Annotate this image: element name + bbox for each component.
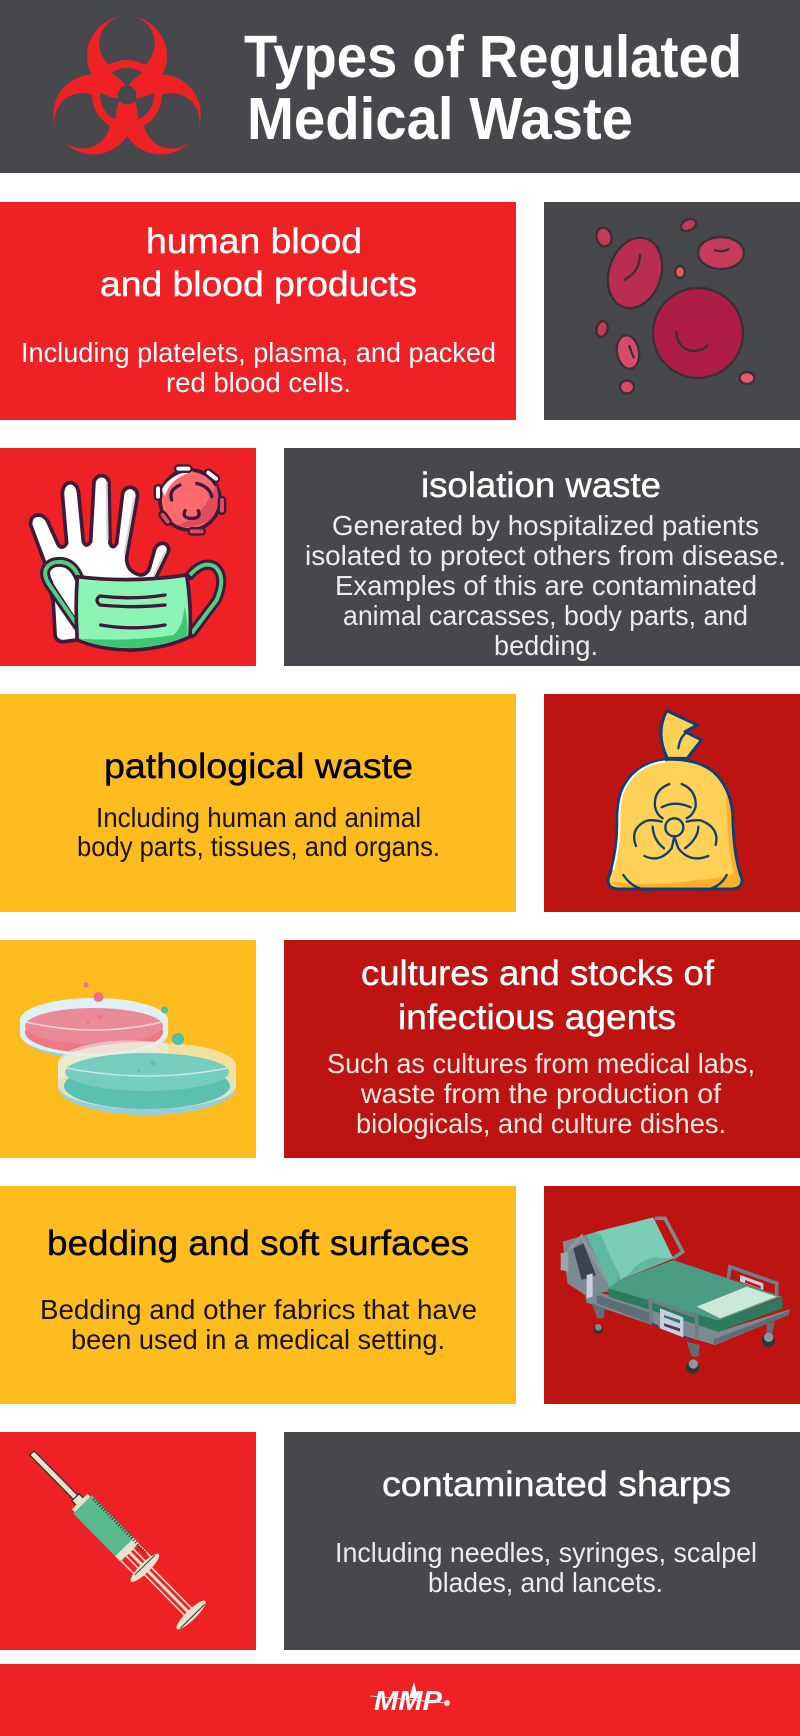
description: cultures and stocks	[327, 1048, 755, 1139]
heading: pathological waste: pathological waste	[104, 747, 413, 786]
heading: bedding and soft surfaces: bedding and soft surfaces	[47, 1224, 469, 1263]
description: isolation waste: Generated by hospitalized patients	[332, 510, 759, 541]
description: contaminated sharps: Including needles, syringes, scalpel	[335, 1537, 757, 1568]
panel: biohazard bag illustration	[544, 694, 800, 912]
mask body	[76, 575, 190, 650]
teal dish	[58, 1041, 236, 1115]
panel: contaminated sharps	[284, 1432, 800, 1650]
description: bedding	[40, 1294, 477, 1355]
glove	[31, 476, 169, 642]
description: cultures and stocks: waste from the production of	[360, 1078, 721, 1109]
heading: human blood: human blood	[146, 222, 362, 261]
description: isolation waste	[305, 510, 786, 661]
description: isolation waste: isolated to protect others from disease.	[305, 540, 786, 571]
panel: glove, mask and virus illustration	[0, 448, 256, 666]
panel: bedding and soft surfaces	[0, 1186, 516, 1404]
description: cultures and stocks: Such as cultures from medical labs,	[327, 1048, 755, 1079]
panel: pathological waste	[0, 694, 516, 912]
pink dish	[20, 998, 168, 1059]
description: isolation waste: animal carcasses, body parts, and	[343, 600, 748, 631]
panel: human blood and blood products	[0, 202, 516, 420]
title: Types of Regulated	[244, 24, 742, 90]
heading: isolation waste: isolation waste	[421, 466, 661, 505]
panel: blood cells illustration	[544, 202, 800, 420]
description: bedding: been used in a medical setting.	[71, 1324, 445, 1355]
panel: syringe illustration	[0, 1432, 256, 1650]
heading: cultures and stocks: infectious agents	[398, 998, 676, 1037]
description: pathological waste: Including human and animal	[96, 802, 421, 833]
description: isolation waste: Examples of this are contaminated	[335, 570, 757, 601]
description: pathological waste: body parts, tissues, and organs.	[77, 831, 440, 862]
description: human blood: Including platelets, plasma, and packed	[21, 337, 496, 368]
panel: cultures and stocks of infectious agents	[284, 940, 800, 1158]
panel: hospital bed illustration	[544, 1186, 800, 1404]
virus	[158, 469, 222, 531]
icon: syringe	[18, 1439, 209, 1632]
icon: hospital bed	[561, 1217, 790, 1374]
description: isolation waste: bedding.	[494, 630, 598, 661]
heading: human blood	[100, 222, 417, 304]
title: Medical Waste	[247, 86, 633, 152]
description: contaminated sharps: blades, and lancets.	[428, 1567, 663, 1598]
heading: contaminated sharps: contaminated sharps	[382, 1465, 731, 1504]
mask straps	[45, 562, 79, 627]
panel: header	[0, 0, 800, 173]
title	[244, 24, 742, 152]
description: human blood: red blood cells.	[166, 367, 351, 398]
panel: petri dishes illustration	[0, 940, 256, 1158]
description: pathological waste	[77, 802, 440, 862]
heading: cultures and stocks: cultures and stocks of	[361, 954, 714, 993]
description: bedding: Bedding and other fabrics that have	[40, 1294, 477, 1325]
panel: isolation waste	[284, 448, 800, 666]
heading: human blood: and blood products	[100, 265, 417, 304]
icon: blood cells	[594, 217, 754, 394]
icon: biohazard symbol	[53, 16, 201, 154]
description: contaminated sharps	[335, 1537, 757, 1598]
icon: biohazard bag	[608, 711, 742, 890]
icon: petri dishes	[20, 982, 236, 1115]
icon: glove, mask and virus	[31, 469, 222, 650]
heading: cultures and stocks	[361, 954, 714, 1037]
logo: MMP	[374, 1685, 442, 1716]
panel: footer	[0, 1664, 800, 1736]
description: cultures and stocks: biologicals, and culture dishes.	[356, 1108, 726, 1139]
description: human blood	[21, 337, 496, 398]
